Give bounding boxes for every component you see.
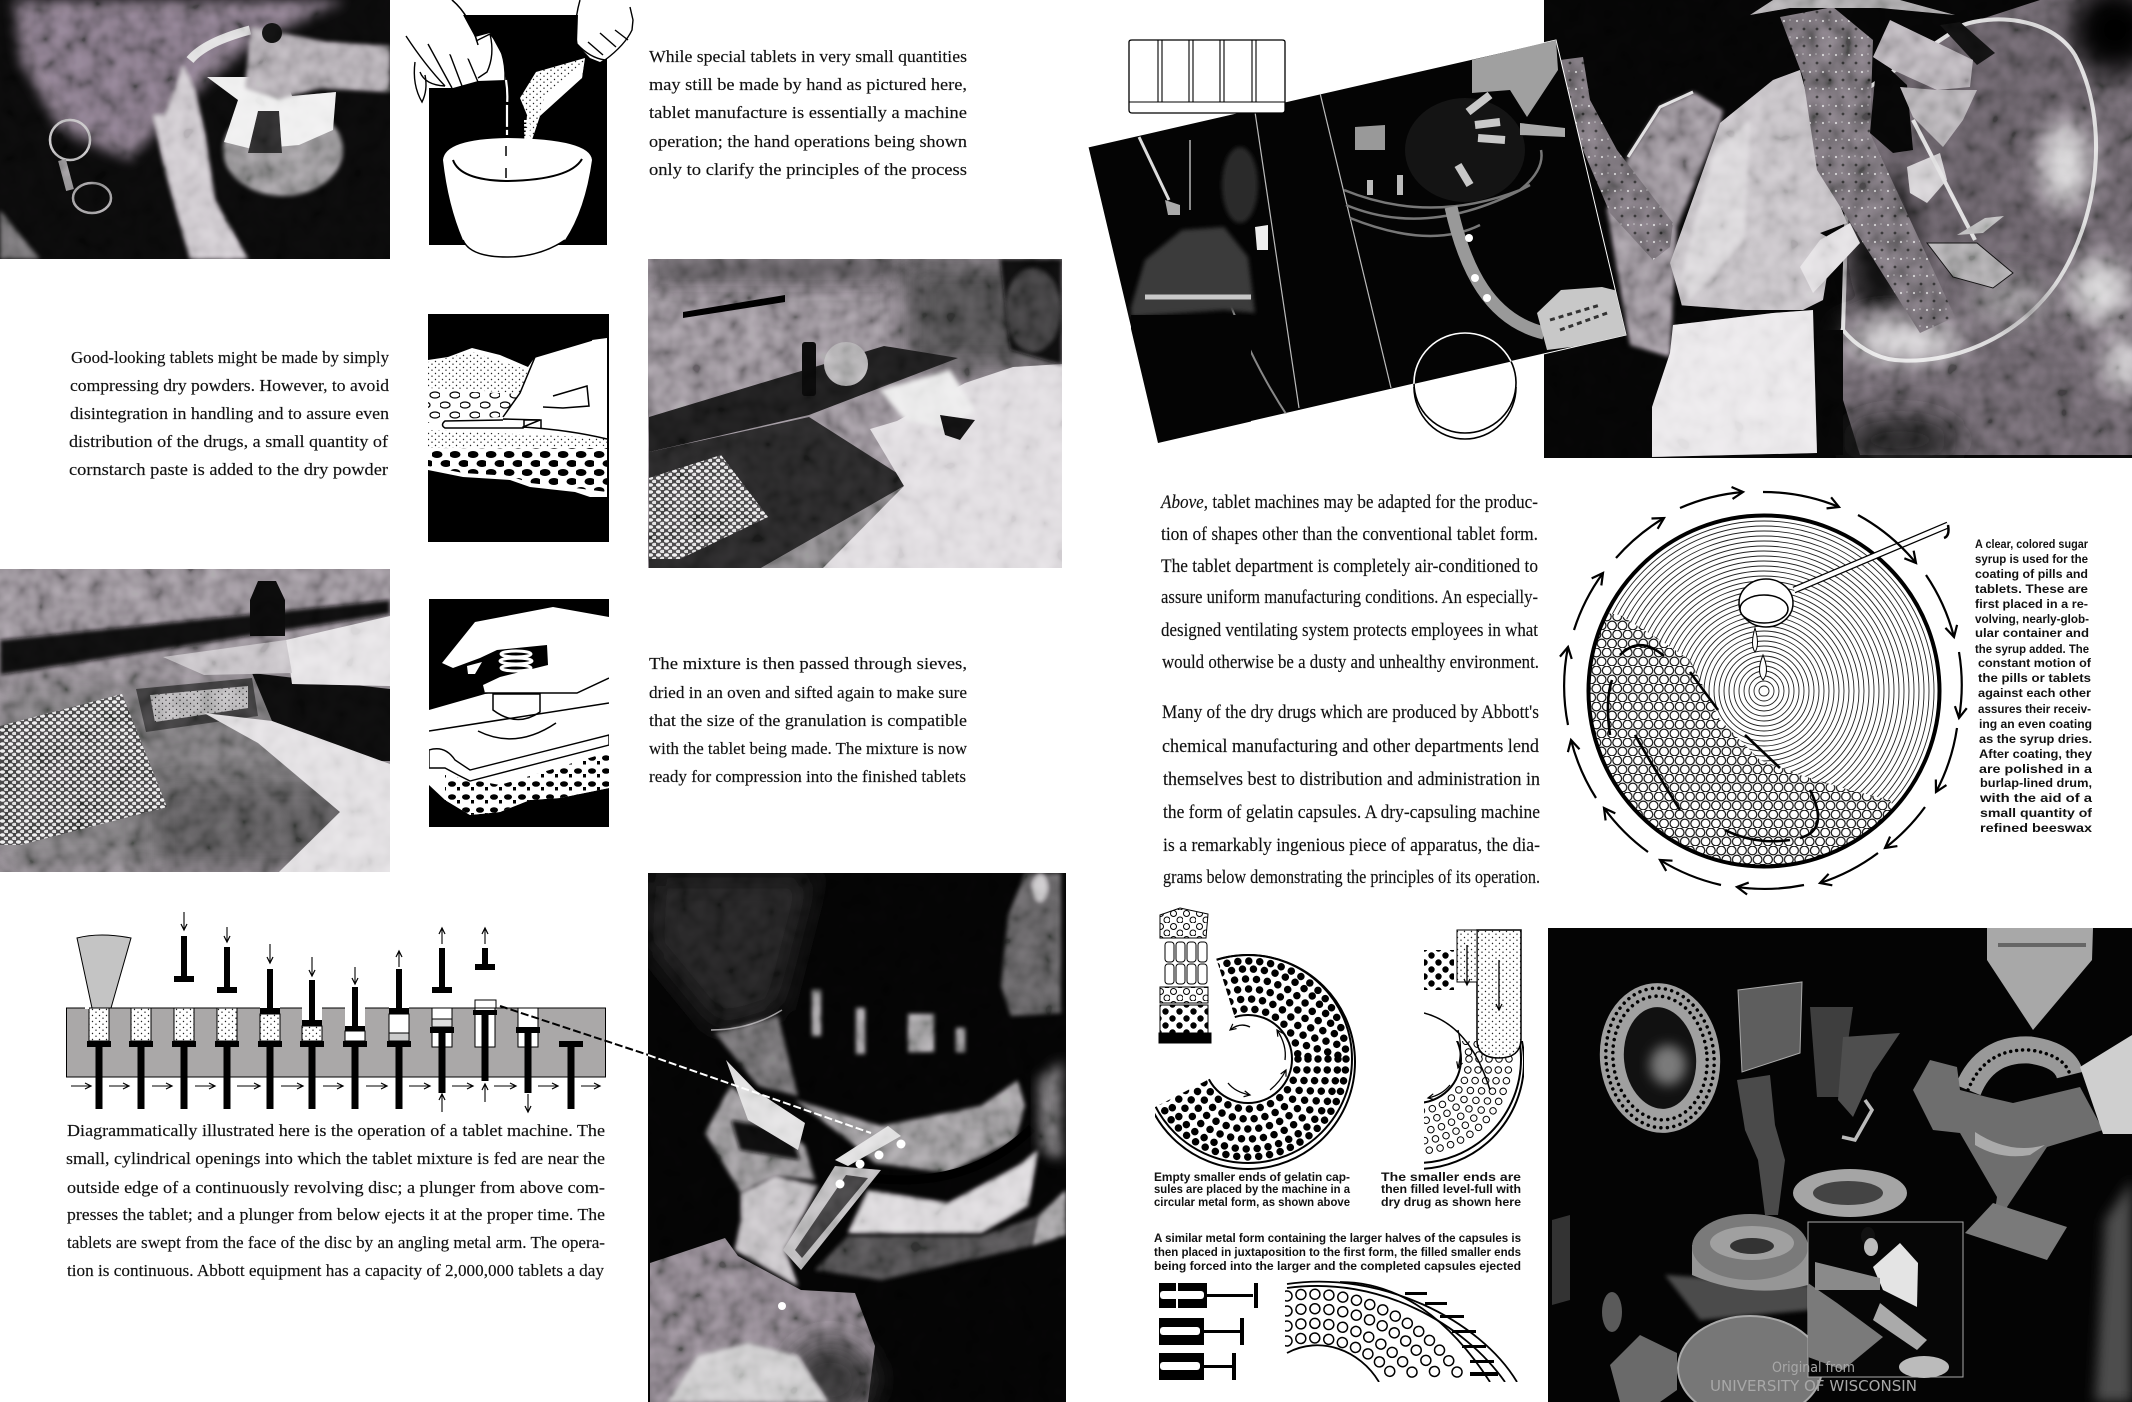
hat brim (1750, 0, 1955, 15)
text block: special tablets: only to clarify the principles of the process (649, 160, 967, 179)
text block: air conditioning and dry capsules: chemical manufacturing and other departments lend (1162, 736, 1539, 757)
text block: special tablets: While special tablets in very small quantities (649, 47, 967, 66)
ejected bars (1405, 1292, 1498, 1376)
pockets (89, 1000, 538, 1047)
powder (428, 352, 528, 393)
caption: empty smaller ends (1154, 1170, 1350, 1209)
diagram: ejection plungers (1159, 1283, 1258, 1380)
bench (649, 346, 958, 452)
text block: sugar syrup coating: the pills or tablets (1978, 671, 2091, 685)
hopper (648, 873, 815, 1030)
turret (1405, 98, 1525, 202)
disc ring (795, 1080, 1025, 1173)
photo: hands with mortar and pestle (0, 0, 390, 259)
photo: capsule machine parts with inset (1548, 928, 2132, 1402)
text block: tablet machine description: tablets are swept from the face of the disc by an angling metal arm. The opera- (67, 1233, 605, 1252)
hand (1907, 153, 1947, 203)
diagram: shaped tablets outline (1128, 39, 1286, 114)
disc dots (778, 1140, 906, 1310)
pipe front (1780, 7, 1955, 333)
text block: tablet machine description: outside edge of a continuously revolving disc; a plunger from above com- (67, 1178, 605, 1197)
inset photo (1808, 1222, 1963, 1377)
illustration: hand pressing paste through plate (428, 314, 609, 542)
text block: sugar syrup coating: A clear, colored sugar (1975, 537, 2088, 551)
man in white coat (823, 364, 1062, 568)
outer rotation arrows (1564, 492, 1962, 889)
reflections (812, 990, 965, 1054)
lower arm (735, 1176, 818, 1286)
caption: smaller ends filled: then filled level-full with (1381, 1182, 1521, 1196)
text block: sugar syrup coating (1975, 537, 2093, 835)
hand (442, 607, 609, 693)
tablet die (493, 694, 540, 720)
face (1900, 87, 1977, 147)
machine base rings (1344, 150, 1542, 236)
ring form lower (1692, 1245, 1808, 1291)
forearm (153, 65, 248, 259)
filled holes (1325, 967, 1509, 1151)
text block: good-looking tablets: disintegration in handling and to assure even (70, 404, 390, 423)
diagram: capsule ends in circular metal form (1155, 908, 1356, 1170)
face shadow (1870, 57, 1913, 153)
text block: tablet machine description: presses the tablet; and a plunger from below ejects it at the proper time. The (67, 1205, 605, 1224)
text block: sugar syrup coating: ular container and (1975, 626, 2089, 640)
diagram: coating drum with rotation arrows (1559, 486, 1968, 896)
text block: special tablets: operation; the hand operations being shown (649, 132, 968, 151)
text block: sugar syrup coating: assures their receiv- (1978, 702, 2091, 716)
text block: sugar syrup coating: volving, nearly-glob- (1975, 612, 2089, 626)
text block: sugar syrup coating: constant motion of (1978, 656, 2092, 670)
mortar (223, 104, 343, 196)
bowl (650, 1238, 875, 1402)
drum opening (1843, 19, 2096, 361)
text block: air conditioning and dry capsules (1159, 492, 1540, 888)
diagram: smaller ends filled with dry drug (1424, 929, 1524, 1170)
chute (835, 1126, 901, 1166)
mould plate with tablets (445, 752, 609, 815)
inner rotation arrows (1228, 1025, 1286, 1095)
caption: smaller ends filled: The smaller ends are (1381, 1170, 1521, 1184)
tray (1965, 1203, 2067, 1260)
grey panel (1738, 982, 1802, 1072)
text block: sieves and drying: that the size of the granulation is compatible (649, 711, 967, 730)
collar (848, 1150, 1038, 1233)
bottle and jar (802, 342, 816, 396)
metal form in hand (1968, 1050, 2070, 1090)
dashed pointer (500, 1006, 650, 1056)
black area (252, 673, 390, 761)
hand on pestle (245, 27, 390, 99)
text block: sieves and drying: with the tablet being made. The mixture is now (649, 739, 968, 758)
trousers (1652, 310, 1817, 457)
text block: sugar syrup coating: After coating, they (1979, 747, 2092, 761)
shirt (1670, 70, 1847, 310)
text block: tablet machine description: tion is continuous. Abbott equipment has a capacity of 2,000,000 tablets a day (67, 1261, 604, 1280)
pills (1590, 613, 1892, 864)
ring form middle (1793, 1169, 1907, 1217)
hopper (77, 935, 131, 1008)
top notches (85, 1006, 409, 1026)
photo: man inspecting coating drum (1544, 0, 2132, 458)
caption: empty smaller ends: Empty smaller ends of gelatin cap- (1154, 1170, 1350, 1184)
text block: sieves and drying: dried in an oven and sifted again to make sure (649, 683, 967, 702)
drum body (1840, 0, 2132, 455)
plate holes (428, 448, 607, 492)
text block: sugar syrup coating: ing an even coating (1979, 717, 2092, 731)
concentric rings (1594, 521, 1934, 861)
lower powder (428, 430, 607, 448)
text block: sugar syrup coating: are polished in a (1979, 762, 2092, 776)
stepped parts (1737, 1075, 1785, 1215)
text block: sugar syrup coating: refined beeswax (1980, 821, 2092, 835)
mortar bowl (443, 138, 592, 257)
watermark: source credit (1710, 1360, 1917, 1395)
sleeve (2080, 1035, 2132, 1134)
vertical lines (1139, 93, 1391, 420)
caption: similar metal form: A similar metal form containing the larger halves of the capsules is (1154, 1231, 1521, 1245)
caption: smaller ends filled: dry drug as shown here (1381, 1195, 1521, 1209)
capsule rings (1287, 1294, 1462, 1380)
right edge (2095, 1180, 2132, 1402)
streams (506, 80, 507, 135)
illustration: hand compressing tablet mould (429, 599, 609, 827)
text block: sugar syrup coating: burlap-lined drum, (1980, 776, 2092, 790)
ring (1141, 955, 1355, 1169)
diagram: tablet machine operation (66, 912, 648, 1114)
diagram: ring with completed capsules (1285, 1280, 1518, 1382)
hand and spatula (442, 340, 607, 439)
upper plungers (174, 936, 495, 1031)
photo: technician working at a bench (648, 259, 1062, 568)
text block: special tablets (648, 47, 968, 179)
watermark: source credit: Original from (1772, 1360, 1855, 1376)
sleeves and hands (286, 616, 390, 686)
flask (50, 120, 111, 213)
column and funnel (1810, 1007, 1853, 1097)
photo: rotary tablet machine close-up (648, 873, 1066, 1402)
syrup drops (1752, 628, 1758, 652)
text block: sugar syrup coating: with the aid of a (1979, 791, 2092, 805)
left hand with beaker (429, 15, 506, 88)
tablets (0, 694, 167, 845)
lower skirt (815, 1216, 1038, 1280)
ladle (1913, 120, 1975, 240)
inner pill arrows (1608, 645, 1818, 841)
illustration: pouring liquid and powder into mortar (406, 0, 634, 258)
caption: smaller ends filled (1381, 1170, 1521, 1209)
scoop with powder (520, 58, 585, 140)
left machine part (1131, 227, 1255, 317)
hand and glove (1913, 1060, 2103, 1223)
pipe left (1560, 57, 1673, 260)
text block: good-looking tablets: distribution of the drugs, a small quantity of (69, 432, 388, 451)
text block: sieves and drying (648, 654, 968, 786)
caption: similar metal form (1154, 1231, 1521, 1273)
text block: sieves and drying: The mixture is then passed through sieves, (649, 654, 967, 673)
drum behind man (1607, 92, 1723, 357)
lower plungers (87, 1010, 583, 1109)
text block: good-looking tablets (69, 348, 390, 479)
belt (1677, 305, 1773, 327)
text block: tablet machine description: Diagrammatically illustrated here is the operation of a tablet machine. The (67, 1121, 605, 1140)
outer ring (1313, 955, 1521, 1163)
text block: special tablets: may still be made by hand as pictured here, (649, 75, 967, 94)
left body (705, 1086, 815, 1193)
sieve (428, 390, 520, 423)
hopper top right (1987, 928, 2093, 1030)
text block: good-looking tablets: Good-looking tablets might be made by simply (71, 348, 389, 367)
arm (1451, 207, 1544, 333)
scoop top right (1001, 873, 1061, 1016)
text block: sugar syrup coating: against each other (1978, 686, 2091, 700)
text block: tablet machine description: small, cylindrical openings into which the tablet mixture is fed are near the (66, 1149, 605, 1168)
watermark: source credit: UNIVERSITY OF WISCONSIN (1710, 1377, 1917, 1395)
text block: air conditioning and dry capsules: themselves best to distribution and administration in (1163, 769, 1540, 790)
text block: tablet machine description (66, 1121, 605, 1280)
bowl and pieces (1678, 1316, 1822, 1402)
metal form ring left (1606, 990, 1714, 1126)
cap (1873, 20, 1973, 90)
base smear (1665, 1275, 1810, 1320)
text block: sieves and drying: ready for compression into the finished tablets (649, 767, 966, 786)
photo: hands operating sieve over tablets (0, 569, 390, 872)
white field below (429, 675, 609, 815)
text block: sugar syrup coating: small quantity of (1980, 806, 2093, 820)
motion arrows (71, 912, 600, 1112)
ladle (1794, 525, 1948, 590)
tablets (649, 455, 768, 559)
text block: good-looking tablets: cornstarch paste is added to the dry powder (69, 460, 388, 479)
text block: sugar syrup coating: the syrup added. The (1975, 642, 2089, 656)
text block: special tablets: tablet manufacture is essentially a machine (649, 103, 967, 122)
photo: tablet machine rotated print (1088, 39, 1627, 443)
hopper tube (1477, 930, 1521, 1058)
dashed pointer inside photo (648, 1054, 872, 1134)
capsule stack (1159, 908, 1211, 1043)
diagram: tablet disc outline (1413, 332, 1517, 440)
text block: sugar syrup coating: as the syrup dries. (1979, 732, 2092, 746)
pile of tablets (1537, 287, 1626, 350)
text block: sugar syrup coating: first placed in a re- (1975, 597, 2088, 611)
text block: sugar syrup coating: coating of pills and (1975, 567, 2088, 581)
text block: sugar syrup coating: syrup is used for the (1975, 552, 2088, 566)
text block: sugar syrup coating: tablets. These are (1975, 582, 2088, 596)
tablets pile (668, 1343, 828, 1402)
caption: similar metal form: being forced into the larger and the completed capsules ejected (1154, 1259, 1521, 1273)
caption: similar metal form: then placed in juxtaposition to the first form, the filled smaller ends (1154, 1245, 1521, 1259)
right hand (577, 15, 607, 62)
white field (428, 338, 607, 497)
text block: good-looking tablets: compressing dry powders. However, to avoid (70, 376, 390, 395)
bottle (250, 581, 285, 636)
top right grey fragment (1472, 40, 1558, 117)
